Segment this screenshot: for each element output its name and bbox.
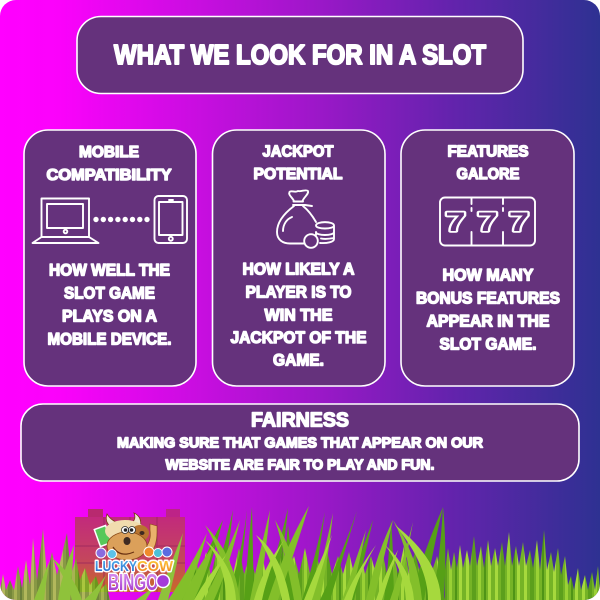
tall right grass teeth	[445, 530, 600, 600]
grass	[0, 506, 600, 600]
body text: jackpot potential: JACKPOT OF THE	[230, 328, 366, 347]
body text: jackpot potential: WIN THE	[264, 306, 332, 324]
logo wordmark: BINGO	[108, 569, 158, 595]
heading: features galore	[448, 144, 529, 183]
logo bingo balls	[96, 547, 172, 558]
heading: jackpot potential: JACKPOT	[262, 144, 334, 160]
soft left accent blades	[34, 533, 183, 600]
body text: features galore: APPEAR IN THE	[426, 312, 550, 330]
logo cow horns	[106, 512, 142, 525]
logo cow head	[105, 520, 149, 560]
body text: fairness	[117, 436, 484, 470]
body text: mobile compatibility: HOW WELL THE	[49, 260, 170, 280]
logo wordmark	[94, 560, 174, 592]
icon: slot machine reels 777	[440, 198, 535, 246]
heading: mobile compatibility: COMPATIBILITY	[46, 167, 172, 184]
heading: fairness: FAIRNESS	[251, 408, 349, 432]
body text: fairness: MAKING SURE THAT GAMES THAT APPEAR ON OUR	[117, 434, 483, 452]
body text: jackpot potential: PLAYER IS TO	[246, 282, 352, 302]
panel: mobile compatibility	[24, 130, 196, 386]
icon: slot machine reels 777: 7	[446, 207, 466, 237]
body text: mobile compatibility	[48, 260, 172, 348]
heading: mobile compatibility: MOBILE	[79, 144, 139, 161]
centre grass teeth	[176, 546, 445, 600]
body text: fairness: WEBSITE ARE FAIR TO PLAY AND FUN.	[166, 456, 434, 474]
panel: features galore	[401, 130, 574, 386]
panel: jackpot potential	[212, 130, 385, 386]
body text: features galore	[416, 266, 560, 354]
icon: laptop connected to tablet	[32, 196, 187, 243]
body text: jackpot potential: GAME.	[273, 350, 324, 370]
title text: WHAT WE LOOK FOR IN A SLOT	[114, 39, 486, 70]
heading: mobile compatibility	[46, 144, 172, 184]
icon: slot machine reels 777: 7	[478, 207, 498, 237]
logo wordmark: COW	[137, 558, 174, 575]
logo wordmark: LUCKY	[95, 558, 137, 575]
body text: mobile compatibility: SLOT GAME	[64, 284, 155, 302]
crate behind logo	[75, 509, 185, 592]
logo: Lucky Cow Bingo	[94, 513, 174, 595]
left grass tuft	[0, 529, 110, 600]
heading: features galore: GALORE	[456, 166, 520, 183]
panel: fairness	[21, 404, 579, 481]
icon: slot machine reels 777: 7	[509, 207, 529, 237]
body text: features galore: HOW MANY	[442, 266, 534, 284]
logo arm and banknote	[93, 524, 158, 549]
body text: jackpot potential: HOW LIKELY A	[242, 260, 354, 278]
title panel	[77, 16, 523, 94]
body text: mobile compatibility: PLAYS ON A	[62, 306, 157, 326]
heading: jackpot potential: POTENTIAL	[254, 166, 343, 183]
logo bingo ball 8	[156, 574, 170, 588]
heading: features galore: FEATURES	[448, 144, 529, 160]
body text: features galore: SLOT GAME.	[440, 334, 536, 354]
body text: jackpot potential	[230, 260, 366, 370]
body text: features galore: BONUS FEATURES	[416, 288, 560, 308]
body text: mobile compatibility: MOBILE DEVICE.	[48, 330, 172, 348]
heading: jackpot potential	[254, 144, 343, 183]
icon: money bag and coins	[277, 190, 334, 248]
